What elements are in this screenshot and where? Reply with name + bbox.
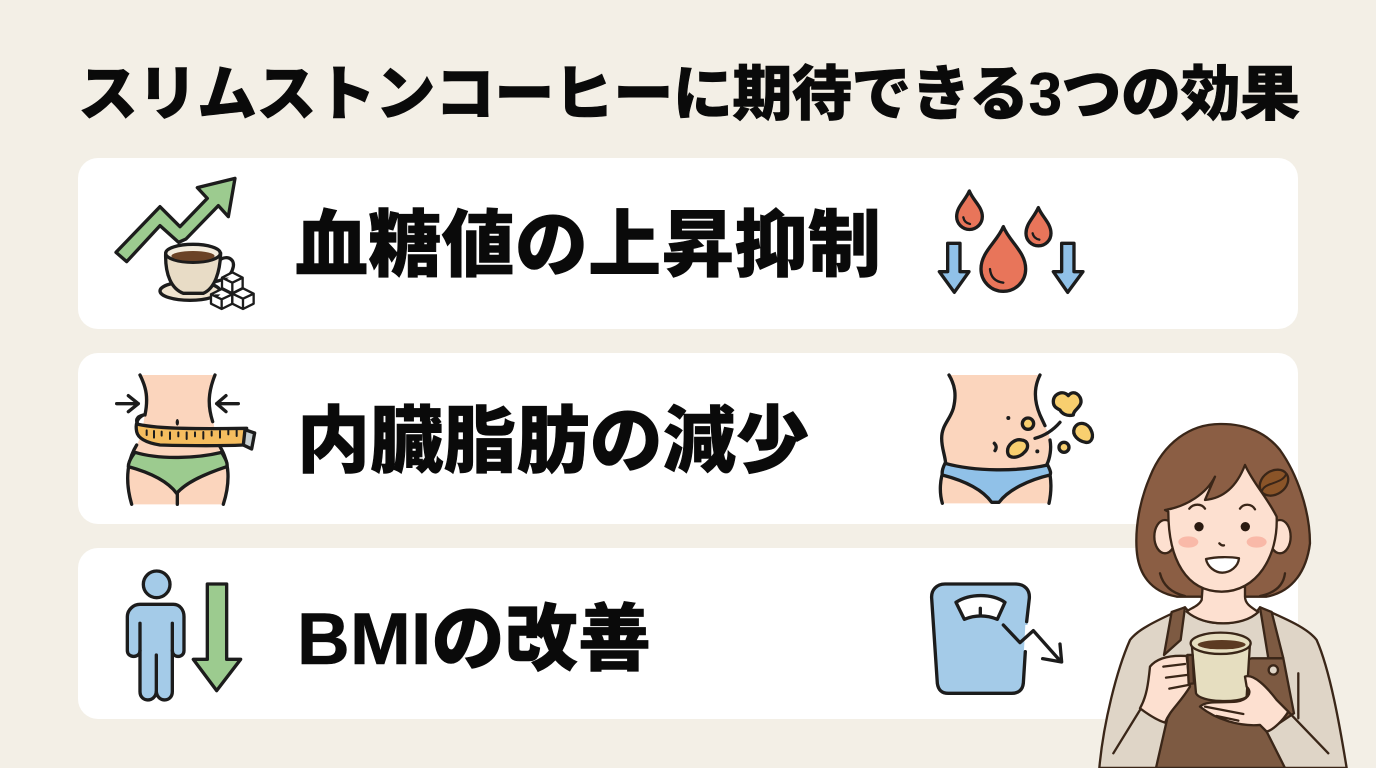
character: barista woman holding coffee bbox=[1099, 424, 1347, 768]
icon: person with down arrow bbox=[127, 571, 241, 700]
face bbox=[1165, 465, 1277, 592]
icon: bathroom scale with falling arrow bbox=[932, 584, 1062, 693]
icon: blood drops with down arrows bbox=[939, 191, 1083, 292]
right hand bbox=[1200, 676, 1288, 732]
icon: rising arrow with coffee and sugar bbox=[116, 178, 254, 309]
title: スリムストンコーヒーに期待できる3つの効果 bbox=[78, 61, 1300, 128]
neck bbox=[1187, 587, 1258, 623]
hair clip: coffee bean bbox=[1255, 464, 1293, 501]
sleeve lines bbox=[1113, 673, 1328, 753]
apron bbox=[1156, 607, 1294, 768]
hair bottom lines bbox=[1160, 573, 1285, 596]
mug handle bbox=[1187, 655, 1194, 684]
ears bbox=[1154, 520, 1291, 553]
heading: BMI: BMIの改善 bbox=[297, 599, 651, 680]
eyes and brows bbox=[1189, 505, 1255, 531]
icon: waist with measuring tape bbox=[117, 375, 255, 504]
sweater bbox=[1099, 607, 1347, 768]
nose and mouth bbox=[1206, 543, 1239, 573]
left hand bbox=[1140, 656, 1190, 723]
panel: visceral fat bbox=[78, 353, 1298, 524]
mug bbox=[1191, 633, 1251, 701]
panel: BMI bbox=[78, 548, 1298, 719]
panel: blood sugar bbox=[78, 158, 1298, 329]
heading: blood sugar: 血糖値の上昇抑制 bbox=[295, 205, 881, 286]
hair back bbox=[1136, 424, 1310, 597]
cheeks bbox=[1178, 536, 1267, 548]
icon: belly with fat leaving bbox=[940, 375, 1092, 503]
heading: visceral fat: 内臓脂肪の減少 bbox=[297, 401, 809, 482]
